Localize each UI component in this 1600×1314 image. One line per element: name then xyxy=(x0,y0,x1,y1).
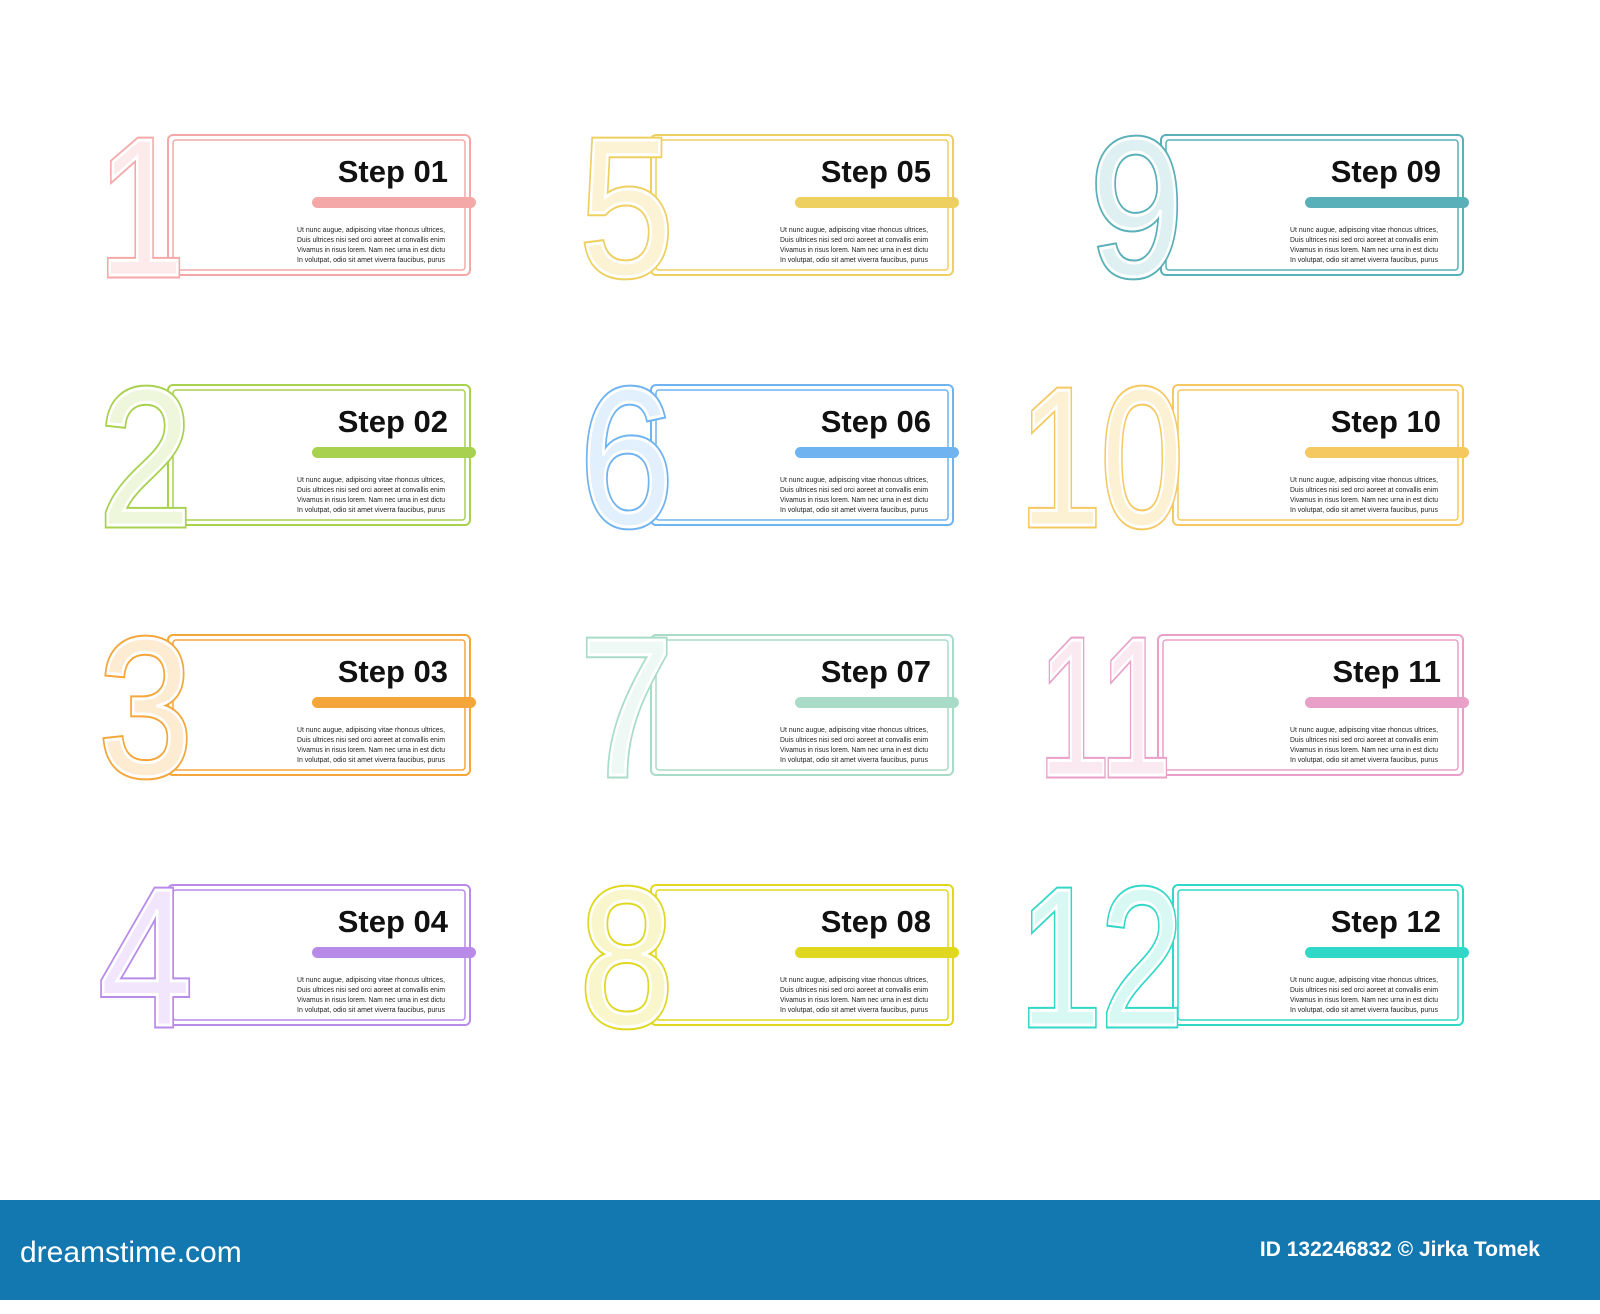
card: step 07: 7 xyxy=(580,597,673,817)
card: step 10: 10 xyxy=(1019,347,1183,567)
card: step 04: 4 xyxy=(99,847,192,1067)
card: step 05: 5 xyxy=(580,97,673,317)
card: step 04: 4 xyxy=(99,847,192,1067)
card: step 02: 2 xyxy=(99,347,192,567)
card: step 07 xyxy=(580,597,959,817)
card: step 11: Step 11 xyxy=(1332,654,1441,689)
card: step 02 xyxy=(99,347,476,567)
card: step 12 xyxy=(1019,847,1469,1067)
card: step 08 xyxy=(580,847,959,1067)
card: step 04: Step 04 xyxy=(338,904,449,939)
card: step 01: 1 xyxy=(98,97,185,317)
footer bar xyxy=(0,1200,1600,1300)
card: step 04 xyxy=(99,847,476,1067)
card: step 01 xyxy=(98,97,476,317)
card: step 01: 1 xyxy=(98,97,185,317)
card: step 07: Step 07 xyxy=(821,654,931,689)
card: step 05: 5 xyxy=(580,97,673,317)
card: step 03: 3 xyxy=(99,597,192,817)
card: step 12: 12 xyxy=(1019,847,1183,1067)
card: step 11: 11 xyxy=(1039,598,1171,818)
card: step 03 xyxy=(99,597,476,817)
card: step 06: 6 xyxy=(580,347,673,567)
card: step 08: 8 xyxy=(580,847,673,1067)
card: step 09: 9 xyxy=(1090,97,1183,317)
card: step 12: 12 xyxy=(1019,847,1183,1067)
card: step 02: Step 02 xyxy=(338,404,448,439)
footer bar: ID 132246832 © Jirka Tomek xyxy=(1260,1238,1540,1261)
card: step 10 xyxy=(1019,347,1469,567)
card: step 06: 6 xyxy=(580,347,673,567)
card: step 03: 3 xyxy=(99,597,192,817)
card: step 02: 2 xyxy=(99,347,192,567)
card: step 01: Step 01 xyxy=(338,154,448,189)
card: step 11: 11 xyxy=(1039,598,1171,818)
card: step 05 xyxy=(580,97,959,317)
card: step 06: Step 06 xyxy=(821,404,931,439)
card: step 05: Step 05 xyxy=(821,154,931,189)
card: step 03: Step 03 xyxy=(338,654,448,689)
card: step 08: Step 08 xyxy=(821,904,931,939)
card: step 07: 7 xyxy=(580,597,673,817)
card: step 09: Step 09 xyxy=(1331,154,1441,189)
card: step 11 xyxy=(1039,598,1469,818)
card: step 06 xyxy=(580,347,959,567)
card: step 09: 9 xyxy=(1090,97,1183,317)
card: step 09 xyxy=(1090,97,1469,317)
card: step 08: 8 xyxy=(580,847,673,1067)
card: step 12: Step 12 xyxy=(1331,904,1441,939)
card: step 10: 10 xyxy=(1019,347,1183,567)
card: step 10: Step 10 xyxy=(1331,404,1441,439)
footer bar: dreamstime.com xyxy=(20,1236,242,1269)
